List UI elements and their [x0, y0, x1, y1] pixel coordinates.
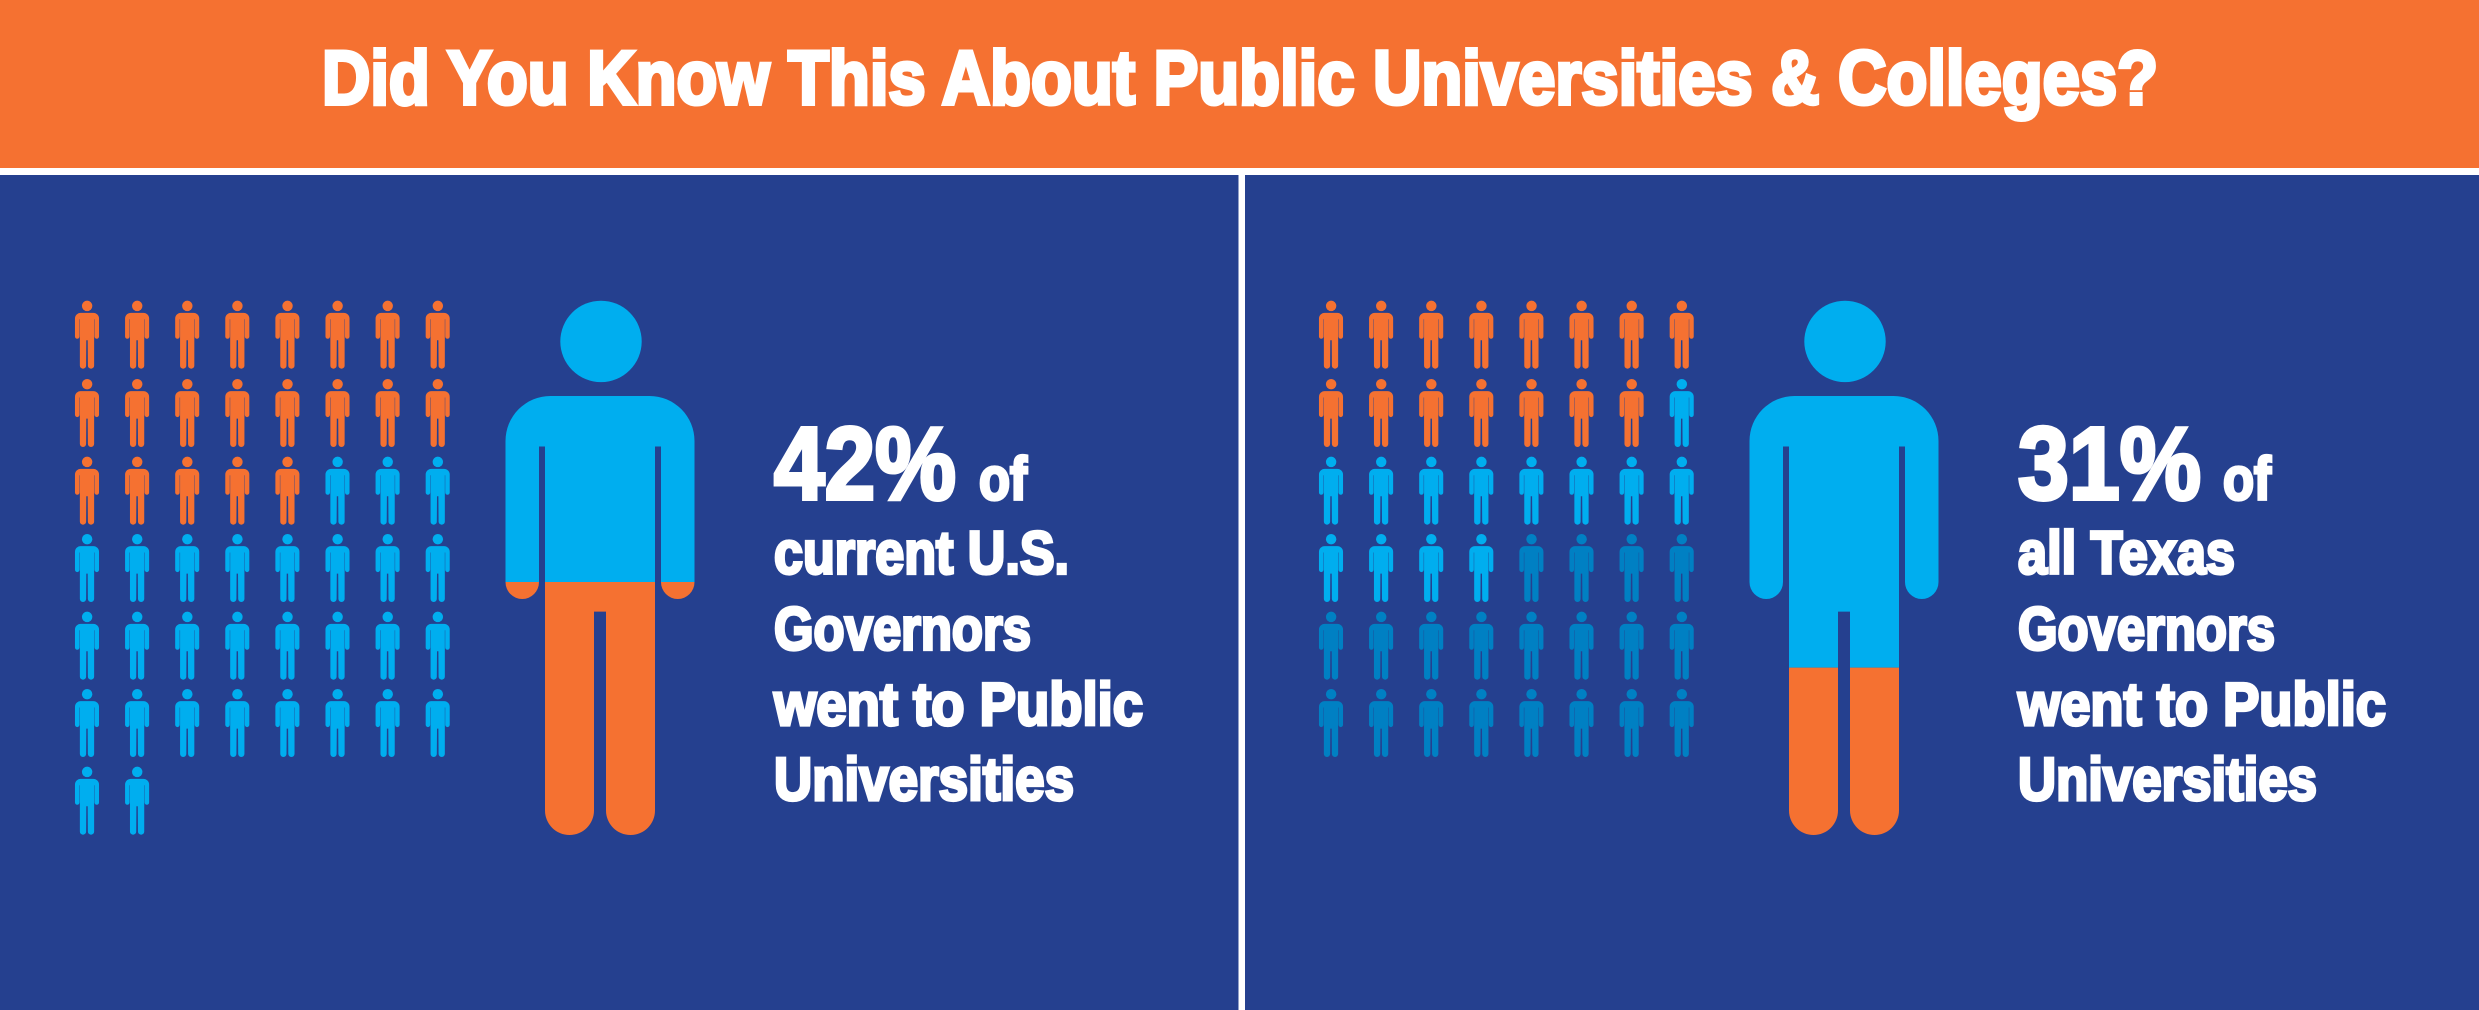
statistic text: 42%: Governors — [774, 595, 1031, 662]
row 7 of pictogram — [75, 767, 149, 835]
statistic text: 31%: Universities — [2018, 746, 2317, 813]
statistic text: 31%: Governors — [2018, 595, 2275, 662]
statistic text: 31% — [2017, 406, 2386, 813]
statistic text: 42%: current U.S. — [774, 519, 1069, 586]
header banner — [0, 0, 2479, 168]
row 3 of pictogram — [1319, 457, 1694, 525]
statistic text: 42%: Universities — [774, 746, 1074, 813]
row 1 of pictogram — [1319, 301, 1694, 369]
row 4 of pictogram — [75, 534, 450, 602]
row 6 of pictogram — [1319, 689, 1694, 757]
pictogram grid: 31% of all Texas governors — [1319, 301, 1694, 757]
statistic text: 31%: went to Public — [2017, 671, 2386, 738]
row 2 of pictogram — [1319, 379, 1694, 447]
pictogram grid: 42% of current U.S. governors — [75, 301, 450, 835]
row 5 of pictogram — [1319, 612, 1694, 680]
statistic text: 31%: of — [2223, 445, 2272, 512]
row 4 of pictogram — [1319, 534, 1694, 602]
statistic text: 31%: 31% — [2018, 406, 2201, 521]
title: Did You Know This About Public Universities & Colleges? — [322, 36, 2158, 121]
large person icon filled 42% orange — [506, 301, 694, 835]
statistic text: 42% — [773, 406, 1143, 813]
row 3 of pictogram — [75, 457, 450, 525]
row 1 of pictogram — [75, 301, 450, 369]
statistic text: 31%: all Texas — [2018, 519, 2235, 586]
statistic text: 42%: went to Public — [773, 671, 1143, 738]
panel: U.S. governors — [0, 175, 1238, 1010]
large person icon filled 31% orange — [1750, 301, 1938, 835]
row 2 of pictogram — [75, 379, 450, 447]
row 5 of pictogram — [75, 612, 450, 680]
statistic text: 42%: of — [979, 445, 1028, 512]
panel: Texas governors — [1245, 175, 2479, 1010]
statistic text: 42%: 42% — [774, 406, 956, 521]
row 6 of pictogram — [75, 689, 450, 757]
